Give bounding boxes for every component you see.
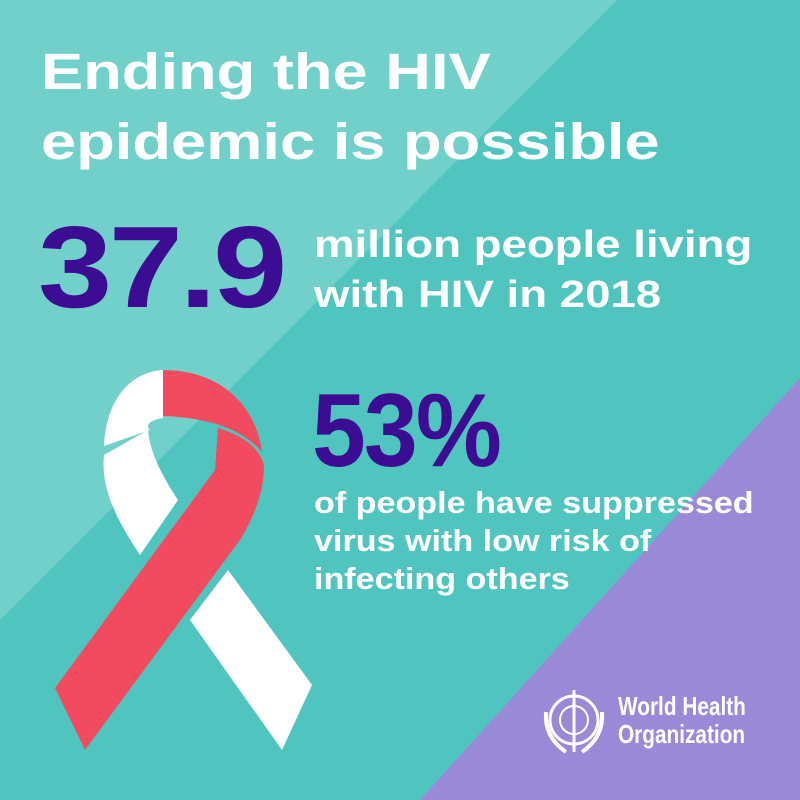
title: epidemic is possible bbox=[41, 113, 660, 170]
stat: 37.9: 37.9 bbox=[38, 202, 284, 332]
stat label: with HIV in 2018 bbox=[314, 274, 661, 316]
stat label: infecting others bbox=[314, 561, 570, 596]
logo text: World Health bbox=[618, 691, 746, 721]
stat: 53%: 53% bbox=[312, 373, 500, 489]
stat label bbox=[314, 485, 754, 596]
icon: ribbon bbox=[55, 370, 312, 750]
logo: WHO bbox=[544, 690, 746, 754]
icon: WHO emblem bbox=[544, 690, 604, 754]
stat label: virus with low risk of bbox=[314, 523, 651, 558]
stat label: of people have suppressed bbox=[314, 485, 754, 520]
title: Ending the HIV bbox=[41, 43, 491, 100]
logo text bbox=[618, 691, 746, 749]
stat label bbox=[314, 224, 752, 316]
logo text: Organization bbox=[618, 719, 745, 749]
stat label: million people living bbox=[314, 224, 752, 266]
title bbox=[41, 43, 660, 170]
